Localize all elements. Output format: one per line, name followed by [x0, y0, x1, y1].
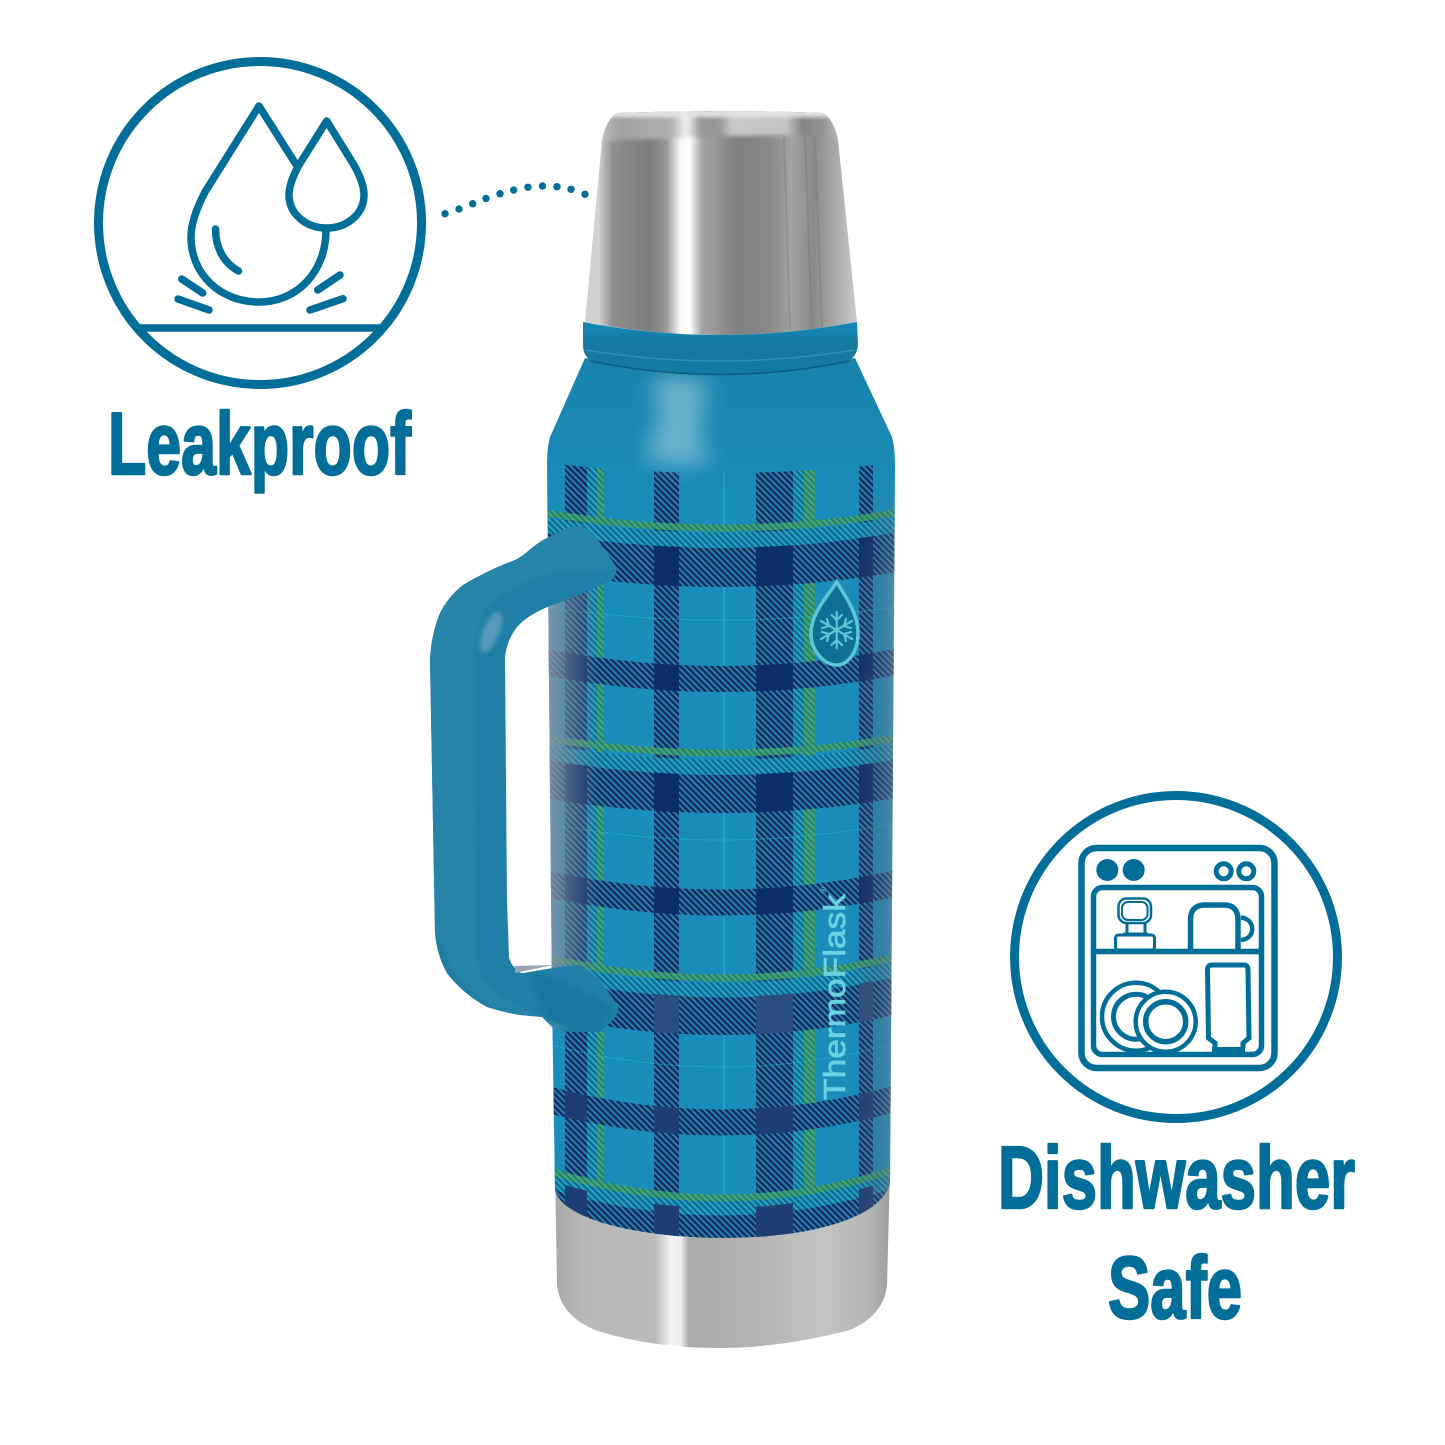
flask cap: steel [585, 105, 857, 335]
infographic canvas [94, 57, 1355, 1348]
heading: Dishwasher Safe [998, 1128, 1355, 1337]
flask body [540, 350, 905, 1260]
panel: leakproof badge [98, 62, 422, 493]
flask collar [583, 322, 858, 374]
plaid pattern [540, 440, 900, 1260]
brand text: ThermoFlask: ThermoFlask [817, 893, 852, 1100]
brand text: ThermoFlask: ® [819, 887, 828, 893]
panel: dishwasher safe badge [998, 796, 1355, 1337]
heading: Leakproof: Leakproof [108, 394, 411, 493]
flask base: steel [555, 1170, 890, 1348]
dotted connector line [441, 182, 589, 217]
icon: circle outline [1014, 796, 1338, 1118]
icon: dishwasher [1082, 848, 1274, 1068]
icon: splash lines and ground [140, 275, 380, 328]
heading: Dishwasher Safe: Safe [1108, 1238, 1242, 1337]
flask illustration [420, 105, 905, 1348]
icon: circle outline [98, 62, 422, 384]
flask handle [420, 520, 619, 1032]
icon: water drops [191, 106, 364, 302]
icon: snowflake drop logo [811, 582, 858, 665]
